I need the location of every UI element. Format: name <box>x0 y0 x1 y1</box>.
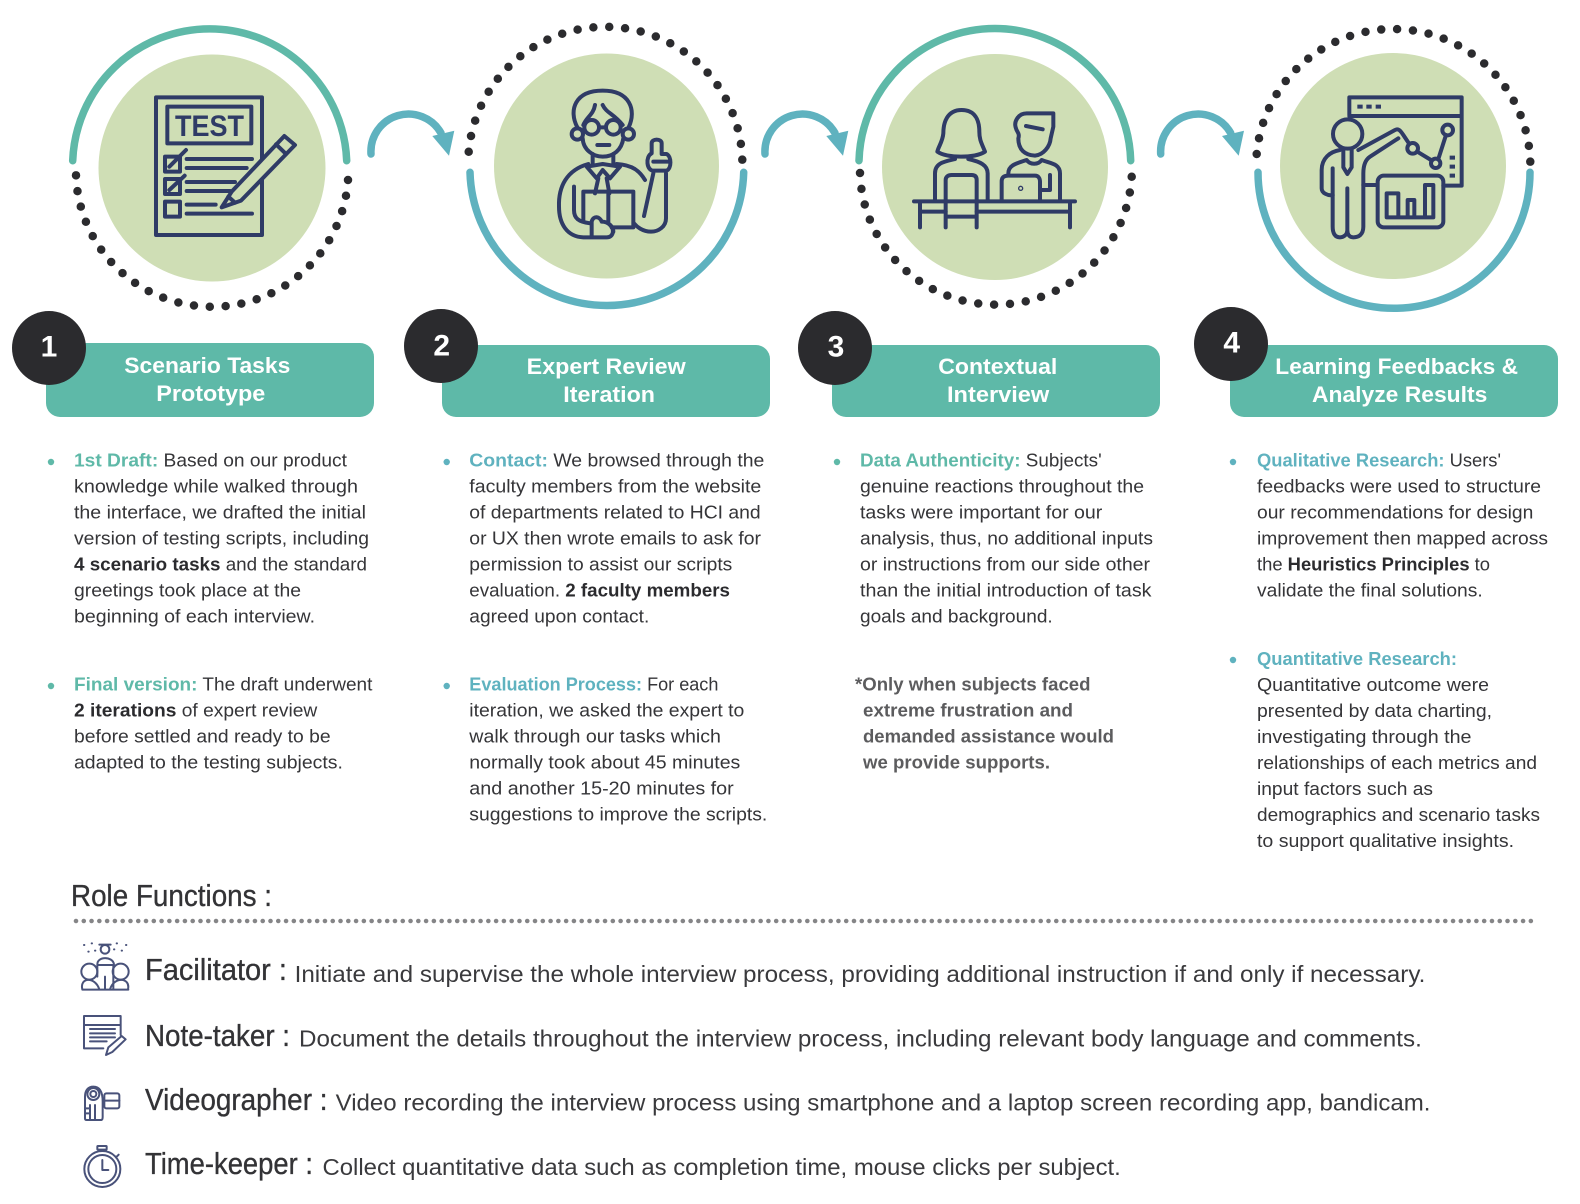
text block: step 2 contact <box>444 451 764 627</box>
text block: step 3 data authenticity: genuine reactions throughout the <box>860 477 1144 497</box>
text block: step 1 first draft: 4 scenario tasks and the standard <box>74 555 367 575</box>
text block: step 3 data authenticity <box>834 451 1153 627</box>
text block: step 1 first draft: greetings took place at the <box>74 581 301 601</box>
panel: step 4 header: Analyze Results <box>1312 382 1487 407</box>
text block: step 4 quantitative research <box>1230 649 1540 851</box>
text block: step 4 quantitative research: demographics and scenario tasks <box>1257 805 1540 825</box>
text block: step 4 qualitative research: validate the final solutions. <box>1257 581 1483 601</box>
panel: step 4 circle <box>1257 29 1530 308</box>
text block: step 2 contact: agreed upon contact. <box>469 607 649 627</box>
panel: step 4 header: 4 <box>1223 326 1240 360</box>
callout: step 3 note: *Only when subjects faced <box>855 675 1090 695</box>
text block: step 1 first draft: version of testing scripts, including <box>74 529 369 549</box>
callout: step 3 note: we provide supports. <box>862 753 1050 773</box>
panel: step 3 circle <box>859 28 1132 305</box>
text block: step 2 evaluation process <box>444 675 767 825</box>
text block: step 4 qualitative research: Qualitative Research: Users' <box>1257 451 1501 471</box>
panel: note-taker row <box>84 1016 1422 1055</box>
text block: step 2 contact: of departments related to HCI and <box>469 503 761 523</box>
panel: facilitator row: Initiate and supervise the whole interview process, providing additional instruction if and only if necessary. <box>295 961 1425 987</box>
text block: step 1 first draft: beginning of each interview. <box>74 607 315 627</box>
text block: step 2 contact: permission to assist our scripts <box>469 555 732 575</box>
panel: videographer row: Videographer : <box>145 1082 328 1117</box>
panel: step 3 header <box>798 311 1160 417</box>
text block: step 3 data authenticity: analysis, thus, no additional inputs <box>860 529 1153 549</box>
icon: expert with book <box>559 91 670 237</box>
text block: step 1 final version: 2 iterations of expert review <box>74 701 318 721</box>
text block: step 4 qualitative research: feedbacks were used to structure <box>1257 477 1541 497</box>
text block: step 2 contact: or UX then wrote emails to ask for <box>469 529 761 549</box>
text block: step 2 evaluation process: normally took about 45 minutes <box>469 753 740 773</box>
text block: step 2 evaluation process: Evaluation Process: For each <box>469 675 718 695</box>
panel: videographer row <box>85 1082 1430 1120</box>
panel: time-keeper row: Collect quantitative data such as completion time, mouse clicks per subject. <box>322 1154 1121 1180</box>
icon: test sheet and pencil: TEST <box>175 110 244 143</box>
text block: step 2 evaluation process: iteration, we asked the expert to <box>469 701 744 721</box>
panel: step 4 header <box>1194 307 1558 417</box>
text block: step 4 qualitative research: our recommendations for design <box>1257 503 1533 523</box>
icon: presenter with charts <box>1322 97 1462 237</box>
text block: step 2 evaluation process: and another 15-20 minutes for <box>469 779 734 799</box>
panel: step 3 header: Contextual <box>938 354 1057 379</box>
callout: step 3 note <box>855 675 1114 773</box>
icon: test sheet and pencil <box>156 97 295 235</box>
text block: step 1 first draft <box>48 451 369 627</box>
text block: step 2 contact: evaluation. 2 faculty members <box>469 581 730 601</box>
icon: note sheet and pencil <box>84 1016 126 1055</box>
text block: step 1 first draft: 1st Draft: Based on our product <box>74 451 347 471</box>
text block: step 4 quantitative research: presented by data charting, <box>1257 701 1492 721</box>
panel: step 2 header: Expert Review <box>527 354 686 379</box>
panel: time-keeper row: Time-keeper : <box>145 1146 313 1181</box>
panel: step 2 header <box>404 309 770 417</box>
text block: step 3 data authenticity: tasks were important for our <box>860 503 1102 523</box>
panel: step 1 circle <box>73 29 348 307</box>
callout: step 3 note: extreme frustration and <box>863 701 1073 721</box>
panel: facilitator row: Facilitator : <box>145 952 287 987</box>
text block: step 1 first draft: the interface, we drafted the initial <box>74 503 366 523</box>
panel: step 3 header: 3 <box>828 330 844 364</box>
text block: step 3 data authenticity: than the initial introduction of task <box>860 581 1153 601</box>
text block: step 4 quantitative research: Quantitative Research: <box>1257 649 1457 669</box>
text block: step 4 quantitative research: investigating through the <box>1257 727 1472 747</box>
arrow: step 3 to 4 <box>1161 114 1244 156</box>
text block: step 2 contact: Contact: We browsed through the <box>469 451 764 471</box>
text block: step 1 first draft: knowledge while walked through <box>74 477 358 497</box>
text block: step 4 quantitative research: relationships of each metrics and <box>1257 753 1537 773</box>
text block: step 3 data authenticity: goals and background. <box>860 607 1053 627</box>
text block: step 4 qualitative research: the Heuristics Principles to <box>1257 555 1490 575</box>
panel: step 2 header: 2 <box>433 330 450 362</box>
panel: facilitator row <box>81 943 1425 990</box>
callout: step 3 note: demanded assistance would <box>863 727 1114 747</box>
text block: step 1 final version: Final version: The draft underwent <box>74 675 372 695</box>
text block: step 2 evaluation process: walk through our tasks which <box>468 727 721 747</box>
arrow: step 1 to 2 <box>371 114 454 156</box>
panel: step 1 header: Prototype <box>156 381 265 406</box>
panel: videographer row: Video recording the interview process using smartphone and a laptop screen recording app, bandicam. <box>336 1090 1431 1116</box>
arrow: step 2 to 3 <box>765 114 848 156</box>
panel: step 4 header: Learning Feedbacks & <box>1275 354 1518 379</box>
text block: step 1 final version <box>48 675 372 773</box>
panel: note-taker row: Note-taker : <box>145 1018 290 1053</box>
icon: video camera <box>85 1087 119 1120</box>
text block: step 4 quantitative research: Quantitative outcome were <box>1257 675 1489 695</box>
heading: role functions: Role Functions : <box>71 878 272 913</box>
icon: interview at desk with laptop <box>914 110 1075 227</box>
icon: facilitator group <box>81 943 129 990</box>
panel: note-taker row: Document the details throughout the interview process, including relevant body language and comments. <box>299 1026 1422 1052</box>
panel: step 1 header <box>12 311 374 417</box>
text block: step 2 contact: faculty members from the website <box>469 477 761 497</box>
icon: stopwatch <box>84 1146 120 1187</box>
text block: step 2 evaluation process: suggestions to improve the scripts. <box>469 805 767 825</box>
panel: step 3 header: Interview <box>947 382 1050 407</box>
panel: step 1 header: Scenario Tasks <box>124 353 290 378</box>
text block: step 3 data authenticity: or instructions from our side other <box>860 555 1150 575</box>
text block: step 3 data authenticity: Data Authenticity: Subjects' <box>860 451 1102 471</box>
text block: step 4 qualitative research <box>1230 451 1548 601</box>
text block: step 1 final version: before settled and ready to be <box>74 727 331 747</box>
text block: step 4 quantitative research: to support qualitative insights. <box>1257 831 1514 851</box>
panel: step 2 header: Iteration <box>563 382 655 407</box>
text block: step 4 qualitative research: improvement then mapped across <box>1257 529 1548 549</box>
text block: step 1 final version: adapted to the testing subjects. <box>74 753 343 773</box>
panel: step 2 circle <box>469 27 744 306</box>
text block: step 4 quantitative research: input factors such as <box>1257 779 1433 799</box>
panel: step 1 header: 1 <box>41 330 57 364</box>
panel: time-keeper row <box>84 1146 1121 1187</box>
